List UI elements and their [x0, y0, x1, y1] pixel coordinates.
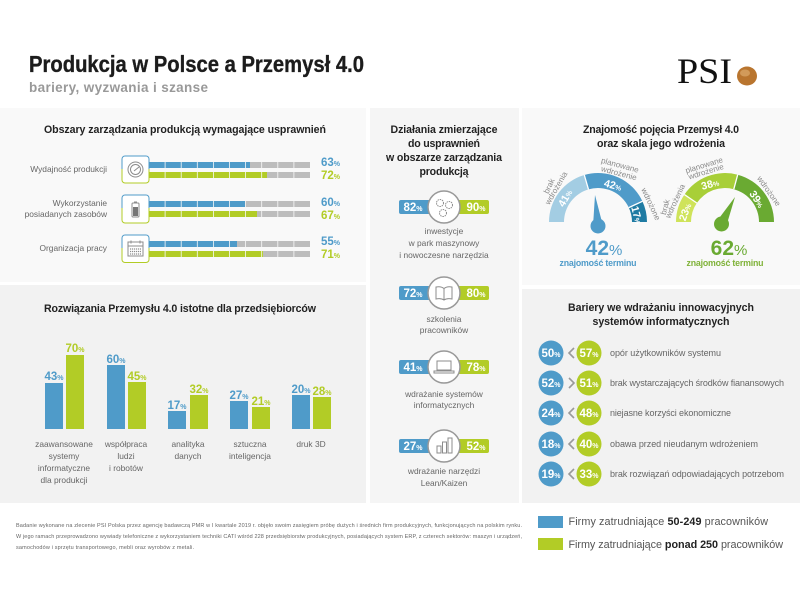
heading: znajomość — [583, 124, 739, 150]
gauge: blue — [542, 156, 662, 268]
gauge: green: brak — [659, 197, 672, 216]
bar chart: 43% — [44, 371, 64, 383]
item: szkolenia: 80% — [466, 288, 486, 300]
gauge: green: wdrożenia — [663, 182, 687, 220]
heading: obszary: Obszary zarządzania produkcją wymagające usprawnień — [44, 124, 326, 136]
heading: działania: do usprawnień — [408, 138, 480, 150]
row: obawa: obawa przed nieudanym wdrożeniem — [610, 439, 758, 449]
gauge: green: 62% — [711, 237, 747, 260]
panel: znajomość pojęcia — [522, 108, 800, 285]
item: systemy informatyczne: informatycznych — [414, 400, 475, 410]
row: wydajność produkcji — [30, 156, 341, 183]
category labels: systemy — [49, 451, 80, 461]
bar chart: 27% — [229, 390, 249, 402]
bar chart: 21% — [251, 396, 271, 408]
bar chart: 32% — [189, 384, 209, 396]
gauge: blue: 42% — [603, 178, 624, 194]
heading: znajomość: oraz skala jego wdrożenia — [597, 138, 725, 150]
category labels: druk 3D — [296, 439, 326, 449]
footnote — [16, 523, 522, 551]
row: wykorzystanie zasobów: 60% — [321, 197, 341, 209]
gauge: green: 38% — [700, 176, 721, 193]
gauge: blue: wdrożone — [639, 186, 662, 222]
gauge: green: wdrożone — [755, 174, 783, 208]
gauge: green — [659, 155, 783, 268]
footnote: samochodów i sprzętu transportowego, mebli oraz wyrobów z metali. — [16, 545, 194, 551]
row: opór użytkowników: 57% — [579, 348, 599, 360]
legend — [538, 516, 783, 551]
logo: PSI walnut: PSI — [677, 51, 732, 91]
row: opór użytkowników: 50% — [541, 348, 561, 360]
row: niejasne korzyści: 24% — [541, 408, 561, 420]
gauge: blue: wdrożenia — [543, 170, 570, 207]
item: systemy informatyczne: 78% — [466, 362, 486, 374]
item: inwestycje: 82% — [403, 202, 423, 214]
category labels: sztuczna — [233, 439, 267, 449]
category labels: zaawansowane — [35, 439, 93, 449]
heading: działania — [385, 124, 502, 178]
item: systemy informatyczne: 41% — [403, 362, 423, 374]
item: systemy informatyczne — [399, 351, 489, 410]
item: szkolenia: szkolenia — [427, 314, 462, 324]
row: wydajność produkcji: 63% — [321, 157, 341, 169]
gauge: green: znajomość terminu — [686, 258, 764, 268]
item: szkolenia: 72% — [403, 288, 423, 300]
category labels: ludzi — [117, 451, 135, 461]
heading: znajomość: Znajomość pojęcia Przemysł 4.0 — [583, 124, 739, 136]
row: obawa: 18% — [541, 439, 561, 451]
footnote: W jego ramach przeprowadzono wywiady telefoniczne z wykorzystaniem techniki CATI wśród 228 przedsiębiorstw produkcyjnych, posiadających system ERP, z czterech sektorów: maszyn i urządzeń, — [16, 534, 522, 540]
legend: Firmy zatrudniające ponad 250 pracowników — [568, 539, 783, 551]
category labels: danych — [174, 451, 202, 461]
row: niejasne korzyści: niejasne korzyści ekonomiczne — [610, 408, 731, 418]
item: szkolenia — [399, 277, 489, 335]
item: lean kaizen: Lean/Kaizen — [421, 478, 468, 488]
row: brak środków: 51% — [579, 378, 599, 390]
item: lean kaizen — [399, 430, 489, 488]
gauge: blue: 41% — [556, 187, 576, 209]
item: inwestycje: i nowoczesne narzędzia — [399, 250, 489, 260]
panel: działania — [370, 108, 519, 503]
bar chart: 28% — [312, 386, 332, 398]
row: opór użytkowników — [538, 340, 721, 366]
heading: działania: w obszarze zarządzania — [385, 152, 502, 164]
item: lean kaizen: 27% — [403, 441, 423, 453]
gauge: green: wdrożenie — [686, 162, 725, 182]
bar chart: 45% — [127, 371, 147, 383]
row: wykorzystanie zasobów: Wykorzystanie — [53, 198, 107, 208]
row: brak rozwiązań: brak rozwiązań odpowiadających potrzebom — [610, 469, 784, 479]
panel: bariery — [522, 289, 800, 503]
row: brak środków — [538, 370, 784, 396]
item: lean kaizen: wdrażanie narzędzi — [407, 466, 480, 476]
heading: działania: Działania zmierzające — [390, 124, 498, 136]
item: inwestycje: inwestycje — [425, 226, 464, 236]
bar chart: 20% — [291, 384, 311, 396]
logo: PSI walnut — [677, 51, 757, 91]
gauge: blue: 42% — [586, 237, 622, 260]
item: inwestycje — [399, 191, 489, 260]
subtitle: bariery, wyzwania i szanse — [29, 80, 208, 95]
row: organizacja pracy: 55% — [321, 236, 341, 248]
panel: rozwiązania przemysłu 4.0 — [0, 285, 366, 503]
category labels: współpraca — [104, 439, 148, 449]
row: brak rozwiązań: 33% — [579, 469, 599, 481]
row: organizacja pracy: 71% — [321, 249, 341, 261]
item: inwestycje: w park maszynowy — [408, 238, 480, 248]
item: lean kaizen: 52% — [466, 441, 486, 453]
category labels: analityka — [171, 439, 205, 449]
gauge: blue: brak — [542, 176, 557, 195]
bar chart: 17% — [167, 400, 187, 412]
row: wydajność produkcji: Wydajność produkcji — [30, 164, 107, 174]
row: obawa — [538, 432, 758, 456]
category labels: dla produkcji — [40, 475, 88, 485]
gauge: green: 23% — [677, 201, 695, 223]
bar chart — [44, 343, 332, 429]
heading: działania: produkcją — [420, 166, 469, 178]
row: brak rozwiązań: 19% — [541, 469, 561, 481]
heading: bariery: Bariery we wdrażaniu innowacyjnych — [568, 302, 754, 314]
row: niejasne korzyści: 48% — [579, 408, 599, 420]
category labels: inteligencja — [229, 451, 271, 461]
footnote: Badanie wykonane na zlecenie PSI Polska przez agencję badawczą PMR w I kwartale 2019 r. objęło swoim zasięgiem próbę dużych i średnich firm produkcyjnych, funkcjonujących na polskim rynku. — [16, 523, 522, 529]
row: wykorzystanie zasobów: 67% — [321, 210, 341, 222]
row: brak środków: 52% — [541, 378, 561, 390]
panel: obszary zarządzania — [0, 108, 366, 282]
item: systemy informatyczne: wdrażanie systemów — [404, 389, 484, 399]
row: niejasne korzyści — [538, 400, 731, 426]
bar chart: 60% — [106, 354, 126, 366]
row: organizacja pracy — [40, 235, 341, 262]
row: organizacja pracy: Organizacja pracy — [40, 243, 108, 253]
heading: bariery: systemów informatycznych — [592, 316, 730, 328]
row: wykorzystanie zasobów: posiadanych zasobów — [25, 209, 108, 219]
gauge: green: planowane — [684, 155, 724, 175]
category labels: informatyczne — [38, 463, 90, 473]
row: wykorzystanie zasobów — [25, 195, 341, 223]
gauge: blue: planowane — [600, 156, 640, 175]
heading: bariery — [568, 302, 754, 328]
gauge: blue: wdrożenie — [599, 164, 638, 182]
row: opór użytkowników: opór użytkowników systemu — [610, 348, 721, 358]
row: obawa: 40% — [579, 439, 599, 451]
row: brak środków: brak wystarczających środków fianansowych — [610, 378, 784, 388]
gauge: blue: znajomość terminu — [560, 258, 636, 268]
item: szkolenia: pracowników — [420, 325, 469, 335]
gauge: green: 39% — [746, 189, 767, 211]
heading: rozwiązania: Rozwiązania Przemysłu 4.0 istotne dla przedsiębiorców — [44, 303, 317, 315]
title: Produkcja w Polsce a Przemysł 4.0 — [29, 51, 364, 77]
bar chart: 70% — [65, 343, 85, 355]
item: inwestycje: 90% — [466, 202, 486, 214]
legend: Firmy zatrudniające 50-249 pracowników — [568, 516, 768, 528]
category labels: i robotów — [109, 463, 144, 473]
row: wydajność produkcji: 72% — [321, 170, 341, 182]
category labels — [35, 439, 326, 485]
row: brak rozwiązań — [538, 462, 784, 486]
gauge: blue: 17% — [628, 205, 645, 226]
